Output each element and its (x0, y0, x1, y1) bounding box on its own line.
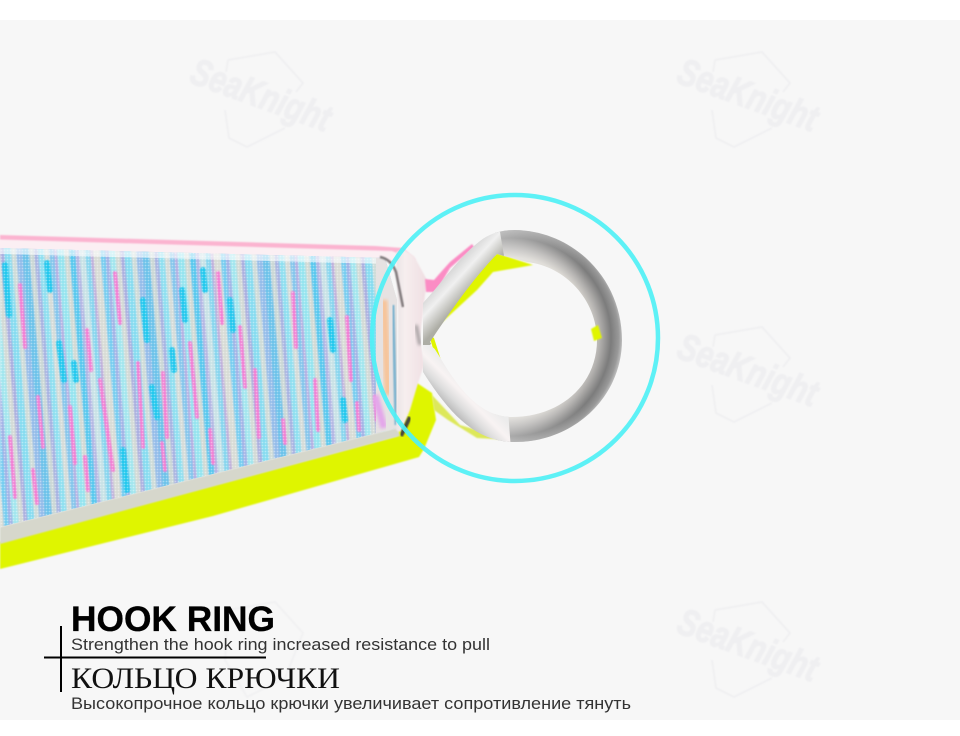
lure: grey lower rim (0, 428, 400, 544)
lure: white top rim (0, 238, 400, 262)
watermark: bottom right: SeaKnight (672, 601, 824, 691)
lure: pink top line (0, 235, 416, 260)
horizontal divider (44, 656, 266, 658)
lure: lilac end stripe (375, 395, 384, 428)
hook ring: yellow spot (591, 325, 602, 341)
lure: orange stripe (384, 300, 388, 395)
callout circle around hook ring (372, 195, 658, 481)
hook ring: tube (423, 230, 622, 442)
hook ring: grey arc (495, 230, 622, 442)
hook ring: yellow paint lower (432, 395, 510, 440)
subtitle: English description: Strengthen the hook ring increased resistance to pull (71, 635, 490, 654)
watermark: top left: SeaKnight (185, 51, 337, 141)
hook ring: upper left silver tube (423, 232, 504, 345)
lure: head highlight (396, 249, 427, 432)
subtitle: Russian description: Высокопрочное кольцо крючки увеличивает сопротивление тянуть (71, 694, 631, 713)
hook ring: pink paint (425, 244, 474, 292)
watermark: top right: SeaKnight (672, 51, 824, 141)
hook ring: yellow paint top (428, 252, 533, 327)
hook ring: grey arc highlight (495, 230, 571, 442)
heading: HOOK RING: HOOK RING (71, 600, 275, 639)
lure: yellow belly (0, 383, 436, 569)
lure: dark seam top (380, 257, 403, 307)
vertical divider (60, 626, 62, 692)
heading: Russian title: КОЛЬЦО КРЮЧКИ (71, 662, 340, 695)
lure: stripe ends fading pale at top (0, 248, 385, 264)
hook ring: yellow paint small (429, 335, 441, 360)
infographic canvas (0, 50, 822, 712)
hook ring: metal eyelet (423, 230, 622, 442)
lure: holographic stripes (0, 240, 400, 540)
lure: pale end panel (376, 258, 397, 433)
watermark: middle right: SeaKnight (672, 326, 824, 416)
lure: dark seam bottom (401, 417, 410, 436)
lure: teal stripe (393, 305, 396, 425)
lure: grey head shading (416, 325, 420, 345)
watermark: behind text (225, 602, 303, 697)
lure: body with holographic stripes (0, 235, 436, 569)
hook ring: lower left white tube (423, 345, 510, 442)
